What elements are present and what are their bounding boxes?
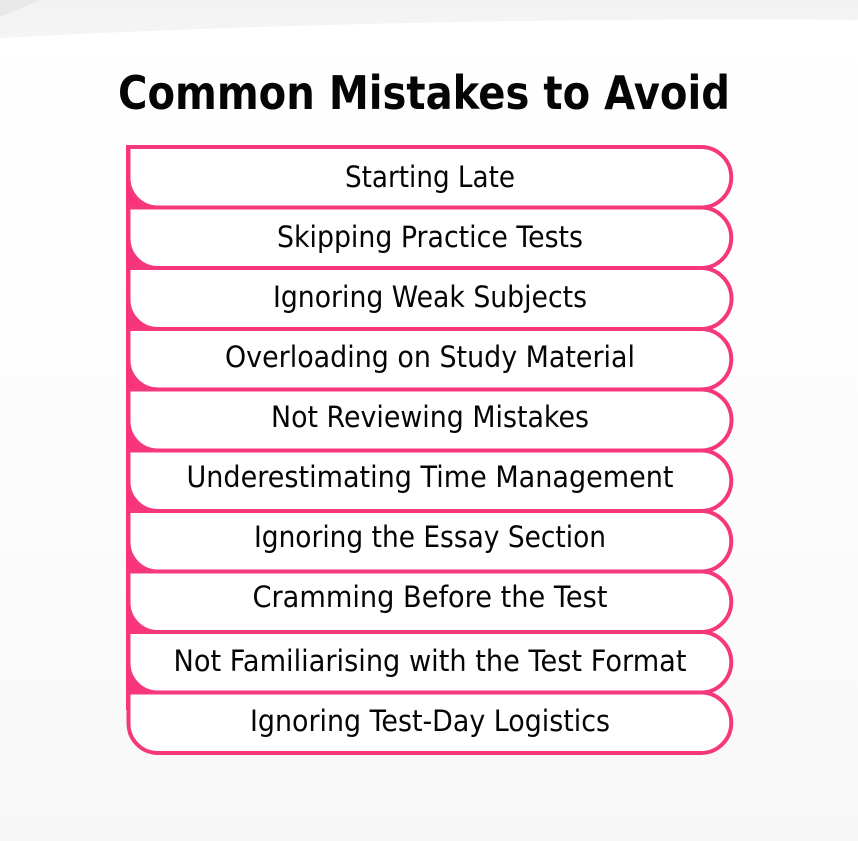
row 9: Not Familiarising with the Test Format (128, 632, 731, 694)
row 3: Ignoring Weak Subjects: Ignoring Weak Subjects (273, 280, 587, 314)
row 1: Starting Late (128, 147, 731, 208)
row 4: Overloading on Study Material: Overloading on Study Material (225, 340, 635, 374)
row 5: Not Reviewing Mistakes: Not Reviewing Mistakes (271, 400, 589, 434)
row 6: Underestimating Time Management: Underestimating Time Management (186, 460, 674, 494)
row 6: Underestimating Time Management (128, 450, 731, 512)
stacked list of mistakes (126, 145, 731, 753)
row 2: Skipping Practice Tests: Skipping Practice Tests (277, 220, 583, 254)
row 2: Skipping Practice Tests (128, 208, 731, 269)
row 8: Cramming Before the Test (128, 572, 731, 633)
row 5: Not Reviewing Mistakes (128, 390, 731, 452)
row 8: Cramming Before the Test: Cramming Before the Test (252, 580, 608, 614)
row 3: Ignoring Weak Subjects (128, 268, 731, 330)
row 7: Ignoring the Essay Section (128, 511, 731, 573)
title: Common Mistakes to Avoid (118, 66, 730, 120)
row 9: Not Familiarising with the Test Format: Not Familiarising with the Test Format (174, 644, 686, 678)
left spine (126, 145, 131, 710)
row 7: Ignoring the Essay Section: Ignoring the Essay Section (254, 520, 606, 554)
row 10: Ignoring Test-Day Logistics: Ignoring Test-Day Logistics (250, 704, 610, 738)
row 10: Ignoring Test-Day Logistics (128, 692, 731, 753)
row 1: Starting Late: Starting Late (345, 160, 515, 194)
row 4: Overloading on Study Material (128, 329, 731, 391)
